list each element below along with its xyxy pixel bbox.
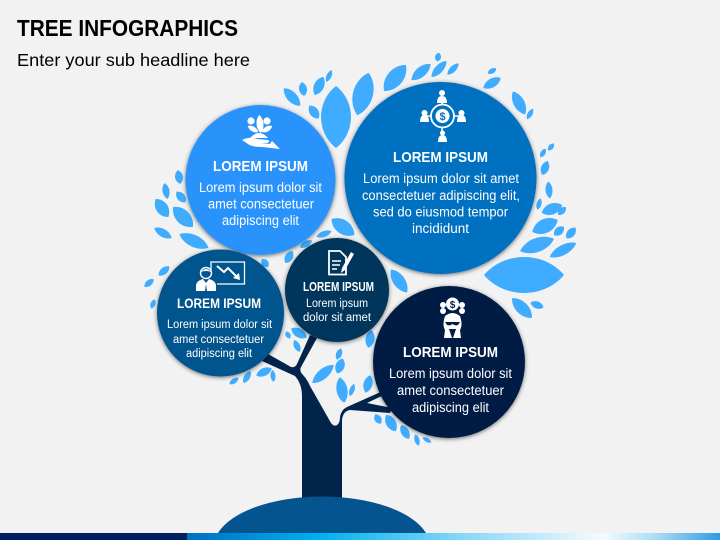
subtitle: Enter your sub headline here: [17, 50, 250, 70]
body text: Lorem ipsum dolor sit: [167, 319, 273, 331]
panel: lower right circle: [373, 286, 525, 438]
panel: middle left circle: [157, 250, 284, 376]
bottom colour bar: [0, 533, 720, 540]
icon: people around dollar: $: [439, 111, 446, 123]
panel: centre circle: [285, 238, 389, 342]
body text: [389, 366, 512, 415]
body text: amet consectetuer: [397, 383, 504, 398]
heading: LOREM IPSUM: [393, 149, 488, 166]
icon: presenter with falling chart: [196, 262, 244, 291]
body text: sed do eiusmod tempor: [373, 204, 508, 220]
panel: top left circle: [186, 105, 336, 255]
heading: LOREM IPSUM: [177, 296, 261, 311]
ground mound: [218, 496, 426, 533]
body text: incididunt: [412, 221, 469, 236]
body text: [362, 171, 520, 236]
body text: [199, 180, 322, 228]
body text: amet consectetuer: [173, 334, 264, 346]
icon: businessman thinking of money: [440, 298, 465, 338]
body text: Lorem ipsum dolor sit: [199, 180, 322, 195]
body text: adipiscing elit: [186, 348, 253, 360]
body text: Lorem ipsum dolor sit amet: [363, 171, 519, 186]
tree leaves: [142, 52, 579, 446]
icon: people around dollar: [420, 90, 466, 142]
body text: [303, 298, 372, 324]
heading: LOREM IPSUM: [303, 280, 374, 294]
body text: [167, 319, 273, 360]
body text: Lorem ipsum: [306, 298, 368, 310]
body text: amet consectetuer: [208, 196, 314, 212]
icon: businessman thinking of money: $: [450, 300, 456, 311]
body text: adipiscing elit: [222, 213, 299, 228]
body text: consectetuer adipiscing elit,: [362, 188, 520, 203]
body text: adipiscing elit: [412, 400, 489, 415]
icon: document and pen: [329, 251, 354, 274]
panel: top right circle: [344, 82, 536, 274]
icon: hand holding plant: [242, 115, 280, 149]
body text: Lorem ipsum dolor sit: [389, 366, 512, 381]
heading: LOREM IPSUM: [403, 344, 498, 361]
body text: dolor sit amet: [303, 312, 372, 324]
heading: LOREM IPSUM: [213, 158, 308, 175]
title: TREE INFOGRAPHICS: [17, 15, 238, 41]
tree trunk and branches: [262, 335, 392, 500]
